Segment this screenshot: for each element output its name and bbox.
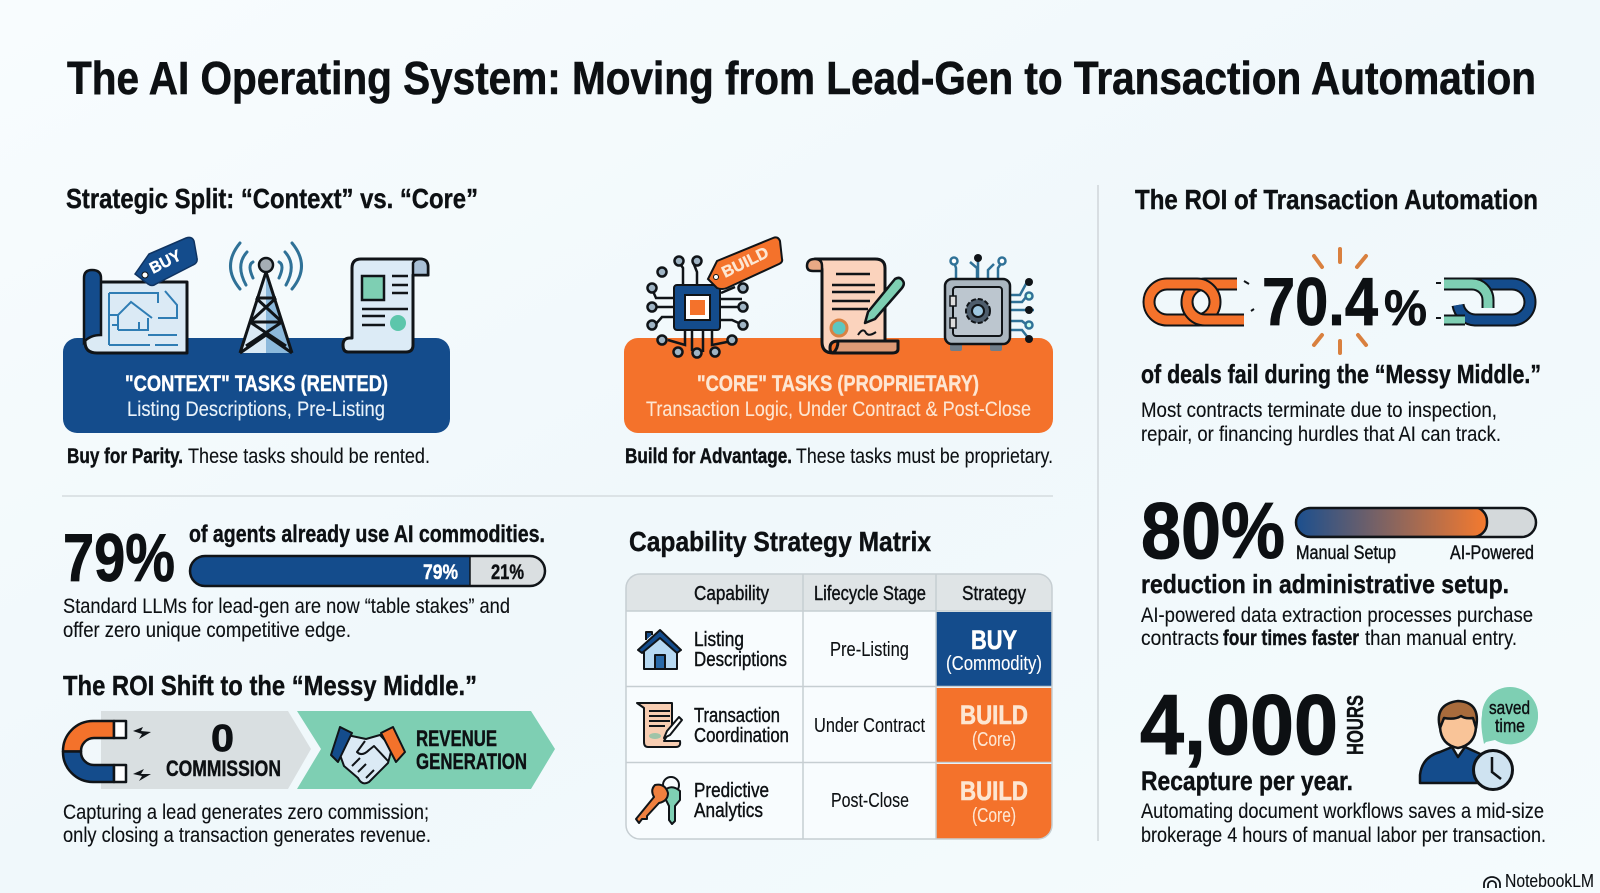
row: listing descriptions: Listing <box>694 629 744 651</box>
core band <box>624 338 1053 433</box>
stat description: AI-powered data extraction processes purchase <box>1141 604 1533 627</box>
context band subheading: Listing Descriptions, Pre-Listing <box>127 398 385 421</box>
icon: circuit safe <box>945 254 1034 351</box>
revenue label: REVENUE <box>416 726 497 751</box>
commission label: COMMISSION <box>166 756 281 781</box>
icon: contract scroll with pen <box>807 259 904 353</box>
icon: document scroll <box>343 259 428 352</box>
row: predictive analytics <box>636 776 1028 827</box>
table header <box>694 583 1026 605</box>
icon: handshake <box>331 727 405 783</box>
row: listing descriptions: BUY <box>971 625 1017 655</box>
text: lead capture note: only closing a transaction generates revenue. <box>63 824 431 847</box>
table: capability matrix <box>626 574 1052 839</box>
core band subheading: Transaction Logic, Under Contract & Post-Close <box>646 398 1031 421</box>
heading: capability strategy matrix: Capability Strategy Matrix <box>629 526 931 557</box>
stat description: Automating document workflows saves a mid-size <box>1141 800 1544 823</box>
hours label: HOURS <box>1342 695 1368 755</box>
icon: small contract <box>637 703 682 747</box>
icon: person with clock and bubble: saved <box>1489 698 1530 718</box>
revenue label <box>416 726 527 774</box>
panel: core tasks <box>624 237 1053 433</box>
progress bar 79/21 <box>189 555 546 587</box>
icon: blueprint with buy tag <box>84 237 197 353</box>
icon: magnet <box>63 721 126 782</box>
caption: buy for parity: These tasks should be rented. <box>188 445 430 468</box>
big number 70.4%: 70.4 <box>1262 264 1378 340</box>
row: predictive analytics: BUILD <box>960 776 1028 806</box>
heading: roi shift: The ROI Shift to the “Messy Middle.” <box>63 670 477 701</box>
stat description <box>1141 399 1501 446</box>
row: predictive analytics: Post-Close <box>831 790 909 812</box>
caption: buy for parity <box>67 445 430 468</box>
icon: circuit chip with build tag <box>648 237 782 358</box>
progress bar 79/21: 79% <box>423 561 458 584</box>
big number 80%: 80% <box>1141 486 1285 575</box>
icon: radio tower <box>230 243 302 353</box>
flow: commission to revenue <box>63 711 555 789</box>
stat description: four times faster <box>1223 627 1359 650</box>
revenue label: GENERATION <box>416 749 527 774</box>
stat: 4000 hours <box>1140 678 1546 847</box>
progress bar 79/21: 21% <box>491 561 524 584</box>
stat description: contracts <box>1141 627 1219 650</box>
row: predictive analytics: Analytics <box>694 800 763 822</box>
context band <box>63 338 450 433</box>
heading: roi of transaction automation: The ROI of Transaction Automation <box>1135 184 1538 215</box>
icon: person with clock and bubble <box>1420 687 1538 790</box>
icon: person with clock and bubble: time <box>1495 716 1525 736</box>
big number 79%: 79% <box>63 520 175 596</box>
stat: 70.4 percent <box>1141 249 1541 446</box>
panel: context tasks <box>63 237 450 433</box>
stat description <box>63 595 510 642</box>
caption: build for advantage: These tasks must be proprietary. <box>796 445 1053 468</box>
text: lead capture note <box>63 801 431 847</box>
stat description: repair, or financing hurdles that AI can track. <box>1141 423 1501 446</box>
row: listing descriptions: Pre-Listing <box>830 639 909 661</box>
caption: buy for parity: Buy for Parity. <box>67 445 183 468</box>
stat description: Standard LLMs for lead-gen are now “table stakes” and <box>63 595 510 618</box>
icon: keys <box>636 777 680 824</box>
stat description: Most contracts terminate due to inspection, <box>1141 399 1497 422</box>
heading: strategic split: Strategic Split: “Context” vs. “Core” <box>66 183 478 214</box>
row: transaction coordination: BUILD <box>960 700 1028 730</box>
big number 70.4%: % <box>1384 280 1427 336</box>
table header: Capability <box>694 583 769 605</box>
row: transaction coordination: Coordination <box>694 725 789 747</box>
bar labels: AI-Powered <box>1450 543 1534 564</box>
stat: 79 percent <box>63 520 546 642</box>
grey arrow <box>101 711 311 789</box>
build tag: BUILD <box>719 244 772 282</box>
icon: house <box>638 630 681 669</box>
bar labels <box>1296 543 1534 564</box>
row: listing descriptions: Descriptions <box>694 649 787 671</box>
text: lead capture note: Capturing a lead generates zero commission; <box>63 801 429 824</box>
caption: build for advantage <box>625 445 1053 468</box>
gradient bar <box>1295 507 1537 537</box>
row: transaction coordination: Transaction <box>694 705 780 727</box>
row: predictive analytics: Predictive <box>694 780 769 802</box>
icon: sparks around number <box>1314 249 1366 353</box>
big number 4,000: 4,000 <box>1140 678 1338 773</box>
buy tag: BUY <box>147 247 185 278</box>
row: listing descriptions: (Commodity) <box>946 653 1042 675</box>
table header: Lifecycle Stage <box>814 583 926 605</box>
row: transaction coordination: (Core) <box>972 729 1016 751</box>
row: transaction coordination <box>637 700 1028 751</box>
table header: Strategy <box>962 583 1026 605</box>
context band heading: "CONTEXT" TASKS (RENTED) <box>125 371 388 396</box>
stat description <box>1141 800 1546 847</box>
stat description: offer zero unique competitive edge. <box>63 619 351 642</box>
row: transaction coordination: Under Contract <box>814 715 925 737</box>
core band heading: "CORE" TASKS (PROPRIETARY) <box>697 371 979 396</box>
teal arrow <box>297 711 555 789</box>
icon: broken chain right <box>1436 283 1530 320</box>
icon: broken chain left <box>1149 281 1254 320</box>
zero value: 0 <box>211 718 234 760</box>
stat description: than manual entry. <box>1365 627 1517 650</box>
stat label: reduction in administrative setup. <box>1141 569 1509 599</box>
stat label: of agents already use AI commodities. <box>189 521 545 548</box>
stat: 80 percent <box>1141 486 1537 650</box>
stat description <box>1141 604 1533 650</box>
caption: build for advantage: Build for Advantage. <box>625 445 792 468</box>
stat label: Recapture per year. <box>1141 766 1353 796</box>
stat description: brokerage 4 hours of manual labor per transaction. <box>1141 824 1546 847</box>
icon: sparks <box>133 727 151 781</box>
row: listing descriptions <box>638 625 1042 675</box>
row: predictive analytics: (Core) <box>972 805 1016 827</box>
bar labels: Manual Setup <box>1296 543 1396 564</box>
